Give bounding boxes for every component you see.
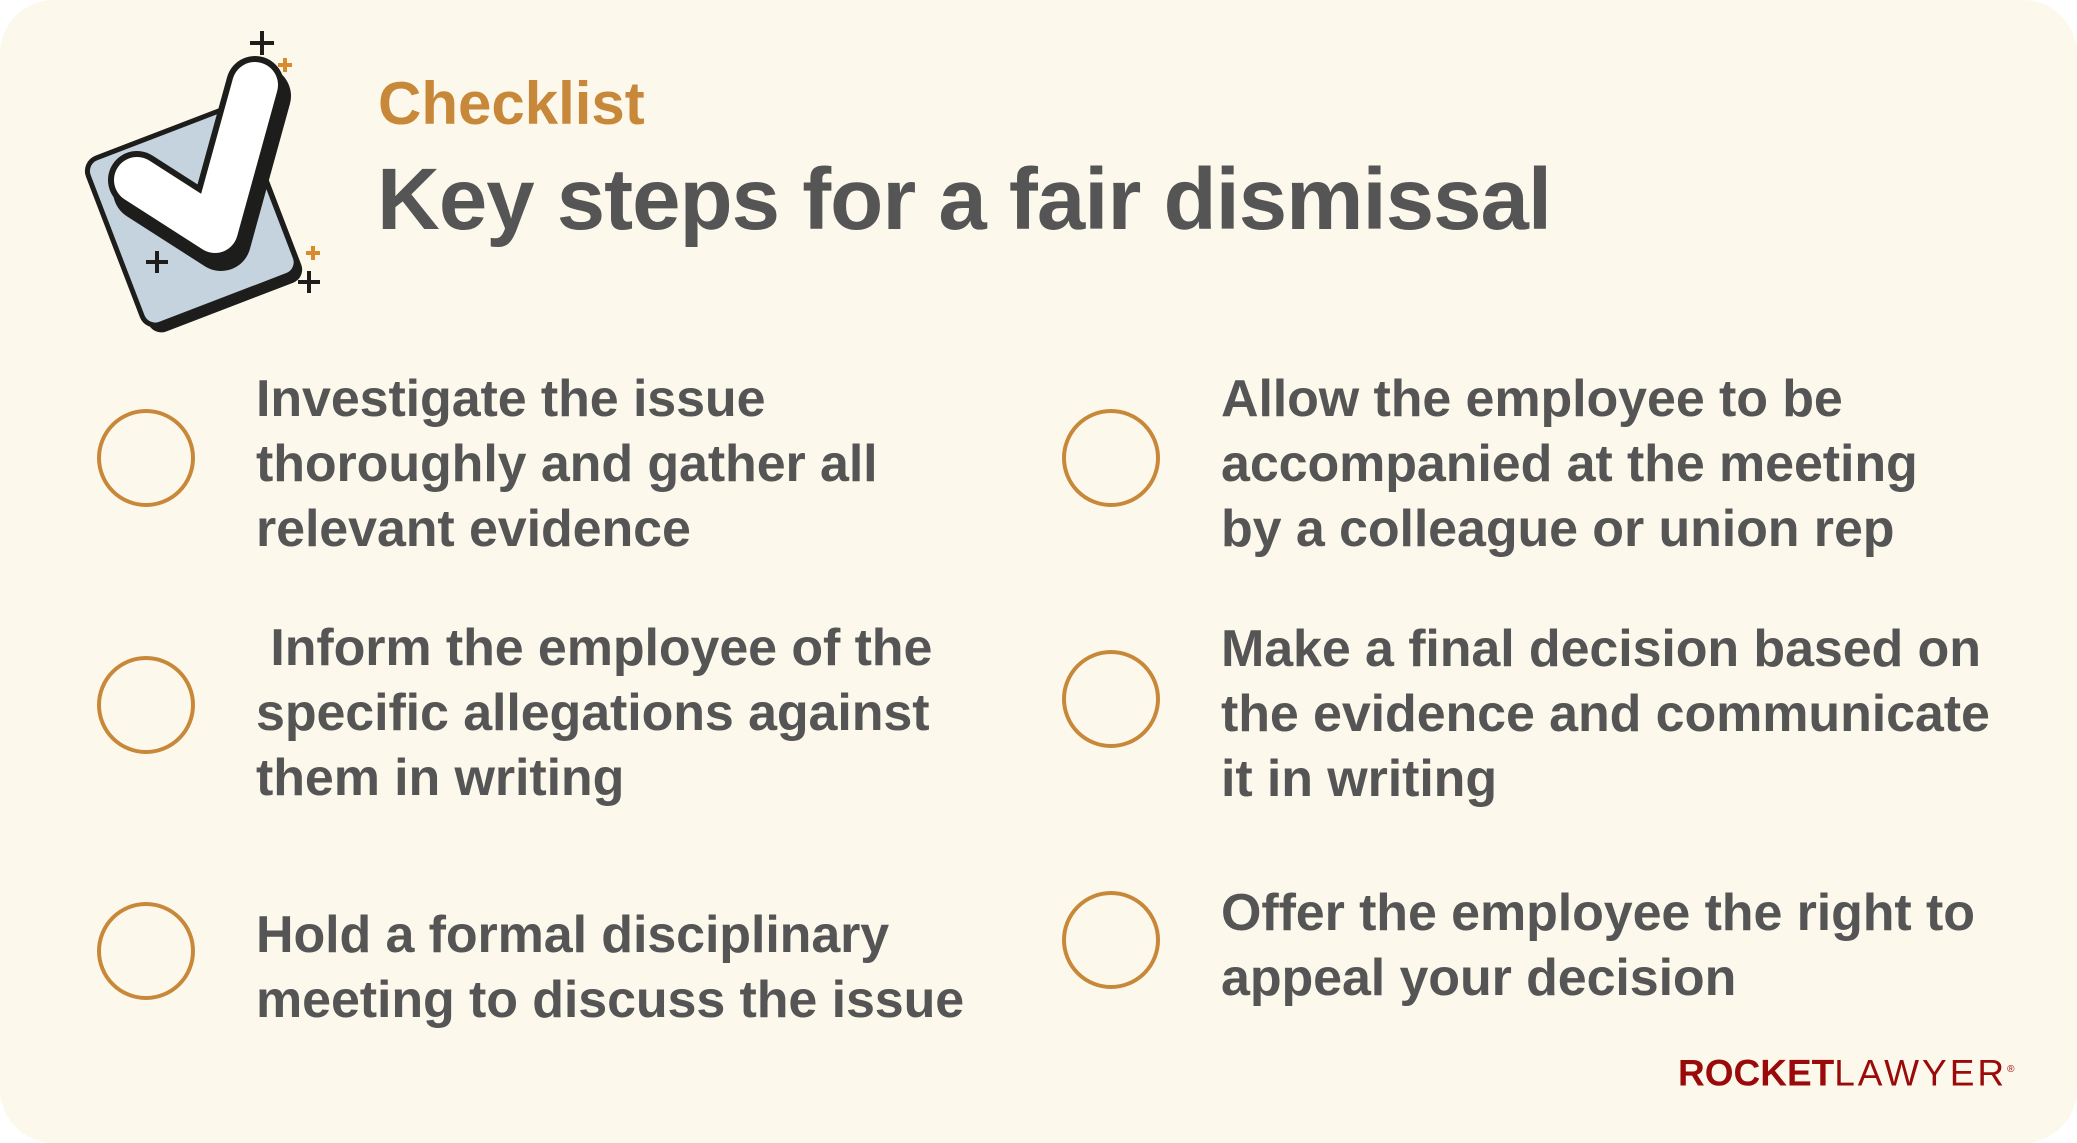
item 4 circle	[1062, 409, 1160, 507]
item 4 text: by a colleague or union rep	[1221, 500, 1894, 558]
item 4 text	[1221, 370, 1918, 558]
item 1 text: Investigate the issue	[256, 370, 765, 428]
item 2 text: specific allegations against	[256, 684, 929, 742]
item 6 text: Offer the employee the right to	[1221, 884, 1975, 942]
item 4 text: Allow the employee to be	[1221, 370, 1843, 428]
item 2 text: them in writing	[256, 749, 624, 807]
item 5 text: it in writing	[1221, 750, 1497, 808]
item 5 text: the evidence and communicate	[1221, 685, 1990, 743]
item 3 text: meeting to discuss the issue	[256, 971, 964, 1029]
item 3 text: Hold a formal disciplinary	[256, 906, 889, 964]
title: Key steps for a fair dismissal	[377, 151, 1551, 248]
item 5 text	[1221, 620, 1990, 808]
item 1 text	[256, 370, 878, 558]
logo: ROCKETLAWYER®	[1678, 1052, 2014, 1093]
item 1 circle	[97, 409, 195, 507]
item 6 text: appeal your decision	[1221, 949, 1736, 1007]
icon: checkbox	[84, 31, 320, 332]
item 6 text	[1221, 884, 1975, 1007]
item 2 circle	[97, 656, 195, 754]
item 6 circle	[1062, 891, 1160, 989]
heading: Checklist: Checklist	[378, 70, 645, 137]
item 4 text: accompanied at the meeting	[1221, 435, 1918, 493]
item 1 text: thoroughly and gather all	[256, 435, 878, 493]
item 3 text	[256, 906, 964, 1029]
item 2 text: Inform the employee of the	[270, 619, 932, 677]
item 2 text	[256, 619, 932, 807]
item 5 text: Make a final decision based on	[1221, 620, 1981, 678]
item 5 circle	[1062, 650, 1160, 748]
item 3 circle	[97, 902, 195, 1000]
item 1 text: relevant evidence	[256, 500, 691, 558]
